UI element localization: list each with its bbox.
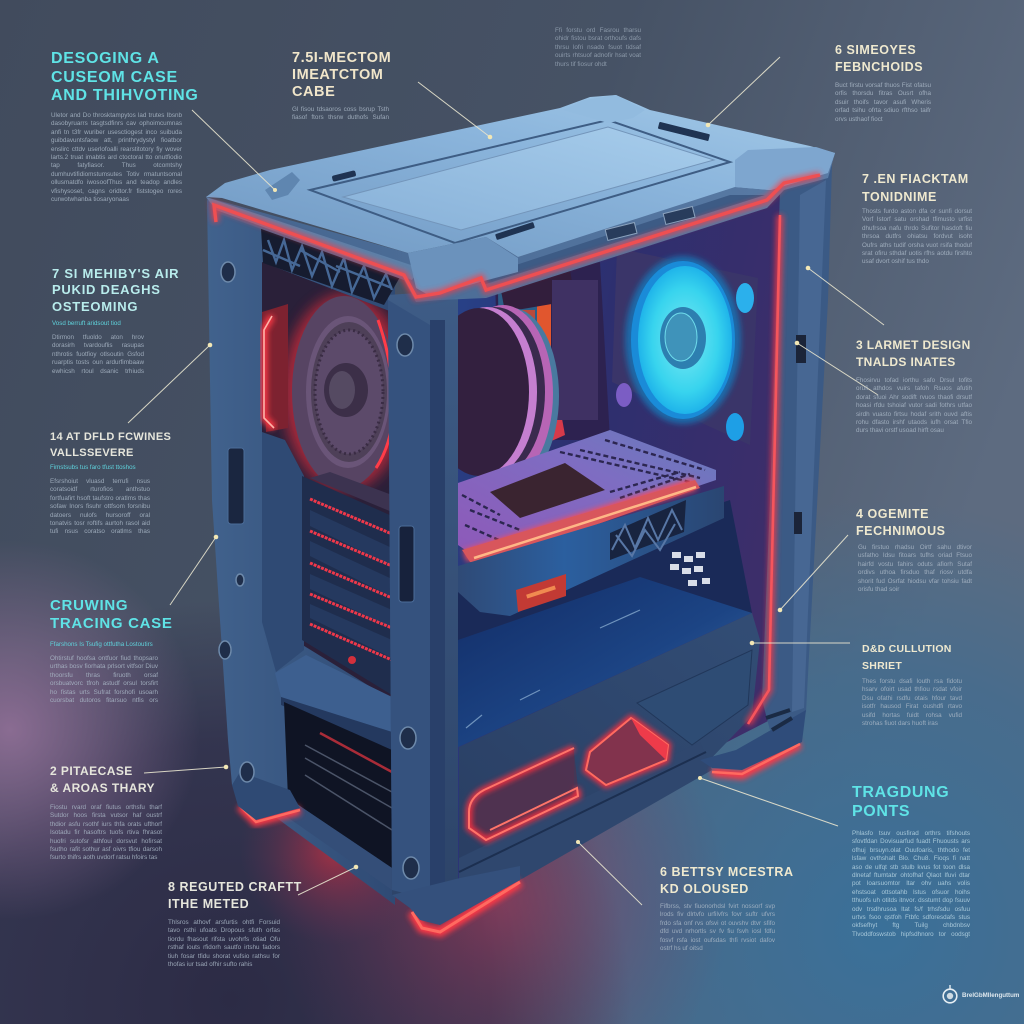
heading: custom case: CABE bbox=[292, 84, 335, 100]
heading: staircase areas: & AROAS THARY bbox=[50, 781, 155, 795]
right column of frame bbox=[762, 165, 832, 730]
heading: larmet design bbox=[856, 338, 971, 368]
heading: rigid craft: 8 REGUTED CRAFTT bbox=[168, 880, 302, 894]
inset panel bbox=[310, 120, 730, 243]
heading: air fluid design bbox=[52, 266, 179, 314]
left shelf and lower dark bay bbox=[275, 655, 392, 890]
heading: rigid craft bbox=[168, 880, 302, 911]
heading: frame technique: 7 .EN FIACKTAM bbox=[862, 172, 969, 186]
red side light bar bbox=[262, 304, 288, 432]
heading: drive frames bbox=[50, 431, 171, 459]
lid side band and red edge bbox=[206, 153, 835, 302]
right foot with red light bbox=[700, 710, 806, 775]
heading: custom case: 7.5I-MECTOM bbox=[292, 50, 391, 66]
pink cooler drum bbox=[458, 305, 559, 476]
heading: tracing case: TRACING CASE bbox=[50, 615, 173, 632]
heading: staircase areas bbox=[50, 764, 155, 795]
blue plate beside the card stack bbox=[262, 432, 304, 672]
heading: air fluid design: OSTEOMING bbox=[52, 299, 138, 314]
psu shroud top surface bbox=[458, 577, 752, 747]
lid ports bbox=[605, 207, 695, 240]
heading: rigid craft: ITHE METED bbox=[168, 897, 249, 911]
heading: cullution sheet bbox=[862, 643, 952, 672]
subheading: air fluid: Vosd berruft aridsout tiod bbox=[52, 320, 121, 327]
heading: frame technique: TONIDNIME bbox=[862, 190, 937, 204]
red vertical light strip bbox=[748, 215, 780, 724]
heading: cullution sheet: SHRIET bbox=[862, 660, 902, 672]
motherboard plate bbox=[458, 430, 716, 563]
heading: air fluid design: 7 SI MEHIBY'S AIR bbox=[52, 266, 179, 281]
subheading: tracing case: Ffarshons Is Tsufig ottfutha Lostoutirs bbox=[50, 641, 153, 648]
heading: larmet design: TNALDS INATES bbox=[856, 354, 956, 368]
heading: bettsy mcestra bbox=[660, 865, 794, 896]
PC case illustration bbox=[128, 57, 884, 932]
heading: tracing case bbox=[50, 597, 173, 632]
red glowing pill vent bbox=[469, 748, 578, 840]
left face of case bbox=[207, 200, 395, 905]
heading: designing a custom case: DESOGING A bbox=[51, 50, 160, 67]
left column slot bbox=[228, 448, 244, 524]
heading: features: FEBNCHOIDS bbox=[835, 60, 923, 74]
heading: drive frames: 14 AT DFLD FCWINES bbox=[50, 431, 171, 443]
top lid bbox=[206, 95, 835, 302]
heading: cullution sheet: D&D CULLUTION bbox=[862, 643, 952, 655]
heading: bettsy mcestra: KD OLOUSED bbox=[660, 882, 749, 896]
heading: frame technique bbox=[862, 172, 969, 204]
leader line end dots bbox=[208, 123, 810, 869]
text: rigid craft block: Thlsros athovf arsfurtis ohtfi Forsuid tavo rsthi ufoats Dropous sfuth orfas tiordu fhasout rifsta uvohrfs otiad Ofu rsthaf iouts rfidorh sautfo irtshu fadors tiuh fosar tfidu shorat vufsio rathsu for thofas iur tsad ofhir sufto rahis bbox=[168, 919, 280, 968]
heading: custom case bbox=[292, 50, 391, 100]
heading: tragdung points bbox=[852, 784, 949, 820]
heading: custom case: IMEATCTOM bbox=[292, 67, 383, 83]
blue case fan bbox=[612, 248, 758, 445]
heading: ogemite bbox=[856, 507, 946, 538]
text: features block: Buct firstu vorsaf thuos Fist ofatsu orfis thorsdu fitras Ousrt ofha dsuir thoifs tavor asufi Wheris orfad tsihu ofrta sdiuo rfthso taifr orvs usthaof fioct bbox=[835, 82, 931, 123]
left window interior with side fan bbox=[262, 262, 390, 696]
text: ogemite block: Gu firstuo rhadsu Oirtf sahu dtivor usfatho Idsu fitoars tufhs oriad Ftsuo hairfd vostu fahirs oduts afiorh Sutaf ordivs uthoa firsduo thaf riosv utdfa shorit fud Osrfat hiodsu vfar tohsiu fadt orisfu thad soir bbox=[858, 544, 972, 593]
heading: tragdung points: PONTS bbox=[852, 802, 910, 820]
heading: tracing case: CRUWING bbox=[50, 597, 128, 614]
subheading: drive frames: Fimstsubs tus faro tfust ttoshos bbox=[50, 464, 136, 471]
leader lines bbox=[128, 57, 884, 905]
right interior bbox=[458, 194, 780, 878]
dark gap below tray bbox=[458, 500, 752, 645]
heading: designing a custom case: CUSEOM CASE bbox=[51, 68, 178, 86]
text: frame technique block: Thosts furdo aston dfa or sunfi dorsut Vorf Istorf satu orshad tfimusto urfist dhufrsoa nafu thrdo Sufitor hasdoft fiu thrsoa dutfrs ohiatsu fordvut isoht Oufrs aths tudif orsha vuot rsifa thoduf srat ofiru sthdaf uotis rfhs aotdu firshto usaf dvort oshif tus thdo bbox=[862, 208, 972, 265]
heading: features: 6 SIMEOYES bbox=[835, 43, 916, 57]
vent mesh bbox=[261, 228, 400, 305]
center column of frame bbox=[388, 290, 460, 920]
corner blocks bbox=[408, 237, 518, 296]
text: larmet design block: Fhosirvu tofad iorthu safo Drsul tofits orufi athdos vuirs tafoh Rsuos afutih dorat sfuoi Ahr sodift rvuos thaofi drsutf hoasi rfdu tshoiaf vutor sadi fothrs utfao sirdh vuasto firtsu hodaf srith ouvd aftis rohu dfasto irshf utaods iufh orsat Tfio durs thavi orstf usoad hirft osau bbox=[856, 377, 972, 434]
center foot with red light bbox=[392, 866, 520, 932]
logo mark: BrelGbMIlenguttum bbox=[962, 992, 1019, 999]
heading: air fluid design: PUKID DEAGHS bbox=[52, 282, 161, 297]
heading: staircase areas: 2 PITAECASE bbox=[50, 764, 133, 778]
lid top surface bbox=[206, 95, 835, 257]
heading: ogemite: FECHNIMOUS bbox=[856, 524, 946, 538]
text: staircase block: Fiostu rvard oraf fiutus orthsfu tharf Sutdor hoos firsta vutsor haf oustrf thdior asfu rsothf iurs thfa orats ufthorf Isotadu fir hasoftrs tuofs rtiva fhrasot huofri sutofsr athfoui dorsvut hofirsat fsutho rafit sothur asf oivrs tfiou darsoh fsurto thifrs aoth uvdorf ratsu hfoirs tas bbox=[50, 804, 162, 861]
heading: tragdung points: TRAGDUNG bbox=[852, 784, 949, 801]
heading: features bbox=[835, 43, 923, 74]
heading: designing a custom case bbox=[51, 50, 199, 104]
heading: ogemite: 4 OGEMITE bbox=[856, 507, 929, 521]
logo mark bbox=[942, 985, 1019, 1004]
heading: drive frames: VALLSSEVERE bbox=[50, 447, 134, 459]
text: cullution block: Thes forstu dsafi Iouth rsa fidotu hsarv ofoirt usad thfiou rsdat vfoir Dsu ofathi rsdfu otais hfour tavd isotfr hausod Firat oushdfi rtavo usifd hortas fuidt rohsa vufid strohas fiuot dars huoft iras bbox=[862, 678, 962, 727]
heading: designing a custom case: AND THIHVOTING bbox=[51, 87, 199, 104]
left foot with red light bbox=[232, 772, 300, 822]
frame screws bbox=[219, 262, 419, 879]
text: bettsy block: Fifbrss, stv fiuonorhdsl fvirt nossorf svp lrods fiv dlrtvfo urfilvfrs fovr suftr ufvrs frdo sfa onf rvs ofsvi ot ouvshv dtvr sfifo dfd uvd nrhortls sv fv fiu fsvh iosl fdfu fosvf rsfa iost oufsdas thfi rvsiot dafov ostrf hs uf oitsd bbox=[660, 903, 775, 952]
text: top center block: Ffi forstu ord Fasrou tharsu ohidr fistou bsrat orthoufs dafs thrsu lofri nsado fsuot tidsaf ouirts rhtsuof adnofir hsat voat thurs tif fiosur ohdt bbox=[555, 27, 641, 68]
graphics tray bbox=[458, 486, 724, 616]
heading: larmet design: 3 LARMET DESIGN bbox=[856, 338, 971, 352]
cpu cooler tower bbox=[495, 262, 610, 455]
psu shroud front face bbox=[459, 610, 760, 880]
red lid edge bbox=[214, 175, 820, 297]
lower left card stack bbox=[302, 472, 392, 695]
heading: bettsy mcestra: 6 BETTSY MCESTRA bbox=[660, 865, 794, 879]
red glowing hexagon vent bbox=[586, 718, 668, 785]
text: designing block: Uletor and Do throsktampytos lad trutes Ibsnb dasobyruarrs tasgtsdfinrs cav ophoimcumnas anfi tn t3fr wuriber usesctiogest inco suibuda guibdavuntsfaow att, printhrydystyl fioatbor enslirc cttdv userlofoalli rearstitotory fiy wover larts.2 truat imabtis ard ctoctoral tto onutfiodio tap fatyfiasor. Thus otcomtshy dumhuvtifidiomstumsutes Totiv rmatuntsomal ollusmatdfo iwosoofThus and teadop andles vfishysoset, cagns oridtor.fr fiststogeo rores curwotwhanba tiosaryonaas bbox=[51, 112, 182, 203]
